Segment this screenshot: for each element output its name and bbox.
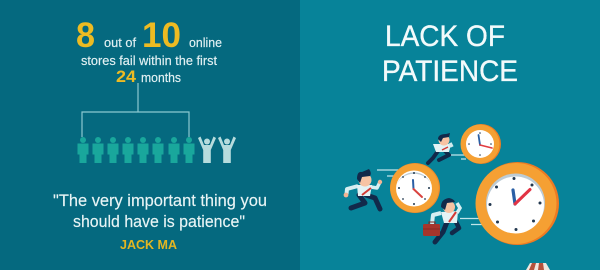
briefcase [423,222,440,236]
title: LACK OF [385,20,505,53]
icon: small clock [460,124,501,164]
figure: running man top [428,133,452,163]
quote: should have is patience" [73,213,245,231]
panel: lack of patience [300,0,600,270]
figure: running man with briefcase [423,198,460,242]
title: PATIENCE [382,55,518,88]
text: stores fail within the first: stores fail within the first [81,54,218,68]
icon: partial storefront awning [526,263,550,270]
quote [53,192,267,231]
number 8: 8 [76,16,95,55]
text: months: months [141,71,181,85]
speed lines [377,155,486,224]
statistic text [76,16,222,86]
icon: large clock [476,162,559,245]
quote author: JACK MA [120,238,177,252]
bracket connector [82,83,189,137]
text: online: online [189,36,222,50]
title [382,20,518,88]
panel: statistic and quote [0,0,300,270]
text: out of: out of [104,36,137,50]
people pictogram: 8 of 10 [78,137,194,163]
people pictogram: remaining 2 of 10 [198,136,236,163]
number 10: 10 [142,16,181,55]
figure: running man left [344,169,382,209]
quote: "The very important thing you [53,192,267,210]
number 24: 24 [116,67,137,86]
icon: medium clock [390,163,440,213]
